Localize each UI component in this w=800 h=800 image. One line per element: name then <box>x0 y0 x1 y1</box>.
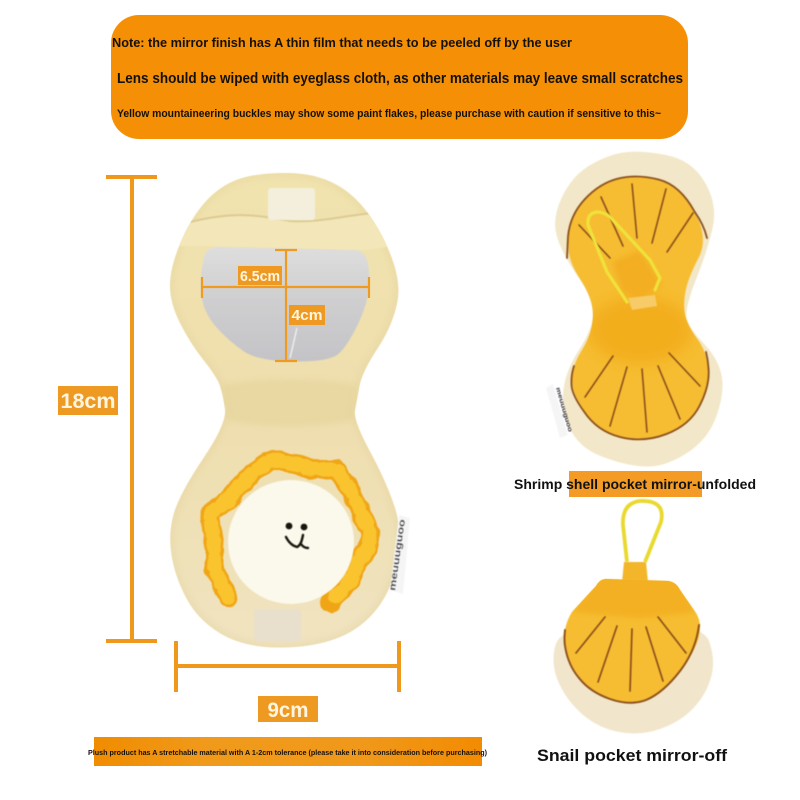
bottom tolerance band <box>88 737 487 766</box>
label: 6.5cm: 6.5cm <box>240 268 280 285</box>
main plush mirror <box>170 173 410 648</box>
side brand tag <box>387 515 410 594</box>
mirror glass <box>201 247 369 362</box>
dimension: total height bracket <box>106 177 157 641</box>
yellow shell fabric <box>568 176 709 439</box>
neck fold shading <box>588 250 692 364</box>
brand tag <box>546 384 573 438</box>
velcro strip top <box>268 188 315 220</box>
smile face <box>286 523 308 548</box>
label: 4cm: 4cm <box>292 307 322 324</box>
yellow shell flap <box>564 579 700 703</box>
strap tab <box>622 562 648 582</box>
round white face <box>228 480 354 604</box>
hanging tab <box>628 295 657 310</box>
mirror glints <box>290 328 297 358</box>
unfolded shell mirror <box>546 152 723 467</box>
carabiner loop <box>623 501 662 562</box>
cream backing <box>555 152 723 467</box>
yellow carabiner <box>588 212 660 302</box>
top stitched arc and rays <box>567 176 707 258</box>
panel: top notes <box>111 15 688 139</box>
label: 9cm: 9cm <box>268 699 308 722</box>
side brand tag: meuuuguoo <box>387 518 407 591</box>
text: buckle note: Yellow mountaineering buckles may show some paint flakes, please purchase with caution if sensitive to this~ <box>117 108 661 120</box>
caption: folded: Snail pocket mirror-off <box>537 746 727 765</box>
label: 18cm: 18cm <box>60 390 116 413</box>
body shading <box>170 173 400 648</box>
upper flap shading <box>572 575 696 618</box>
caption: unfolded: Shrimp shell pocket mirror-unfolded <box>514 477 756 492</box>
caption highlight <box>569 471 702 497</box>
label: 9cm <box>258 696 318 722</box>
velcro strip bottom <box>254 609 301 641</box>
brand tag: meuuuguoo <box>554 387 573 433</box>
plush body outline <box>170 173 400 648</box>
cream pouch <box>553 623 713 733</box>
dimension: mirror width <box>202 277 369 298</box>
dimension: total width bracket <box>176 641 399 692</box>
yellow ruffle trim <box>210 460 370 602</box>
text: tolerance note: Plush product has A stretchable material with A 1-2cm tolerance (please take it into consideration before purchasing) <box>88 748 487 757</box>
text: lens note: Lens should be wiped with eyeglass cloth, as other materials may leave small scratches <box>117 71 683 87</box>
text: film note: Note: the mirror finish has A thin film that needs to be peeled off by the user <box>112 35 572 50</box>
stitched arc and rays <box>564 617 699 703</box>
dimension: mirror height <box>275 250 297 361</box>
bottom stitched arc and rays <box>571 352 709 439</box>
folded shell mirror <box>553 501 713 733</box>
